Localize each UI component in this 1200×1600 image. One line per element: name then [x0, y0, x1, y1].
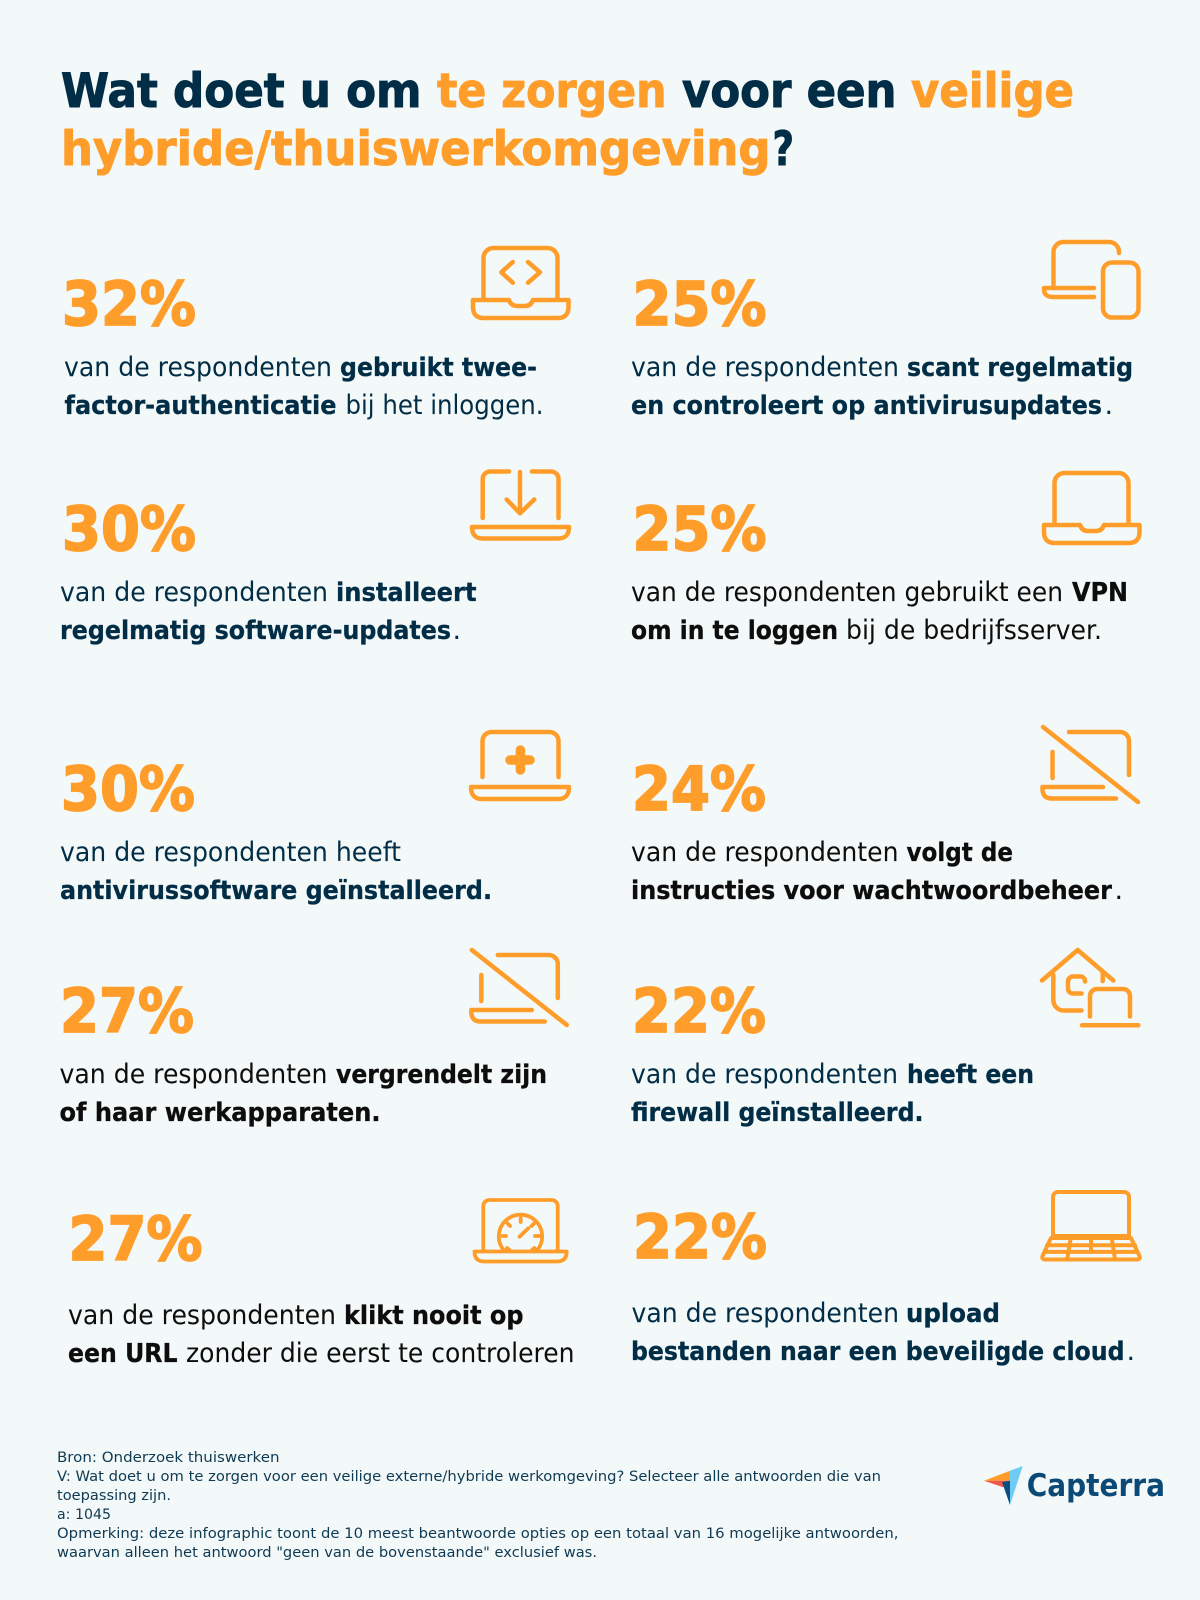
percentage 32%: 32%: [62, 269, 196, 340]
panel: 22% firewall: [631, 950, 1138, 1128]
percentage 27% URL: 27%: [68, 1204, 202, 1275]
Capterra logo: [984, 1466, 1165, 1505]
description 24%: van de respondenten: [631, 837, 898, 868]
description 27% URL: zonder die eerst te controleren: [186, 1338, 574, 1369]
description 27% lock: vergrendelt zijn: [336, 1060, 547, 1090]
description 22% cloud: upload: [906, 1299, 1000, 1329]
description 22% cloud: van de respondenten: [632, 1298, 899, 1329]
description 22% firewall: firewall geïnstalleerd.: [631, 1098, 924, 1128]
percentage 27% lock: 27%: [60, 976, 194, 1047]
description 24%: instructies voor wachtwoordbeheer: [631, 876, 1112, 906]
description 27% URL: [68, 1300, 574, 1369]
description 32%: [64, 352, 544, 421]
description 22% cloud: [631, 1298, 1135, 1367]
icon: laptop with code brackets: [473, 248, 568, 318]
description 22% cloud: bestanden naar een beveiligde cloud: [631, 1337, 1124, 1367]
description 27% URL: van de respondenten: [68, 1300, 336, 1331]
title: te zorgen: [437, 64, 666, 119]
panel: 22% secure cloud upload: [631, 1192, 1140, 1367]
percentage 30% antivirus: 30%: [61, 754, 195, 825]
panel: 32% two-factor authentication: [62, 248, 568, 421]
icon: laptop with gauge: [474, 1200, 567, 1262]
description 30% updates: regelmatig software-updates: [60, 616, 451, 646]
description 22% firewall: [631, 1059, 1034, 1128]
panel: 27% never click URL: [68, 1200, 574, 1369]
footer source notes: toepassing zijn.: [57, 1488, 171, 1504]
icon: laptop and phone: [1044, 242, 1138, 318]
icon: laptop with keyboard: [1042, 1192, 1140, 1260]
description 24%: volgt de: [906, 838, 1013, 868]
description 25% scan: van de respondenten: [631, 352, 899, 383]
description 24%: .: [1114, 875, 1123, 906]
description 25% VPN: van de respondenten gebruikt een: [631, 577, 1063, 608]
description 32%: gebruikt twee-: [340, 353, 537, 383]
description 25% VPN: bij de bedrijfsserver.: [846, 615, 1102, 646]
description 30% antivirus: antivirussoftware geïnstalleerd.: [60, 876, 492, 906]
title: ?: [772, 122, 794, 177]
description 30% antivirus: van de respondenten heeft: [60, 837, 401, 868]
icon: crossed-out laptop: [471, 950, 567, 1025]
description 25% scan: [631, 352, 1133, 421]
logo mark: [984, 1466, 1023, 1505]
panel: 30% software updates: [60, 472, 569, 646]
description 25% scan: scant regelmatig: [907, 353, 1133, 383]
percentage 22% firewall: 22%: [632, 976, 766, 1047]
description 27% lock: of haar werkapparaten.: [60, 1098, 380, 1128]
icon: house with laptop: [1042, 950, 1138, 1025]
description 30% updates: installeert: [336, 578, 476, 608]
footer source notes: a: 1045: [57, 1507, 111, 1523]
title: veilige: [911, 64, 1074, 119]
description 30% antivirus: [60, 837, 492, 906]
description 27% lock: van de respondenten: [60, 1059, 328, 1090]
panel: 24% password instructions: [631, 727, 1138, 906]
description 25% VPN: om in te loggen: [631, 616, 838, 646]
description 27% URL: een URL: [68, 1339, 178, 1369]
title: [61, 64, 1074, 177]
description 32%: factor-authenticatie: [64, 391, 336, 421]
description 30% updates: van de respondenten: [60, 577, 328, 608]
footer source notes: Bron: Onderzoek thuiswerken: [57, 1450, 280, 1466]
panel: 25% VPN: [631, 473, 1140, 646]
panel: 25% virus scan: [631, 242, 1138, 421]
description 27% URL: klikt nooit op: [344, 1301, 524, 1331]
logo wordmark: Capterra: [1027, 1468, 1165, 1504]
title: voor een: [682, 64, 896, 119]
description 22% firewall: heeft een: [907, 1060, 1034, 1090]
description 24%: [631, 837, 1123, 906]
description 22% cloud: .: [1126, 1336, 1135, 1367]
description 32%: bij het inloggen.: [346, 390, 544, 421]
description 25% VPN: VPN: [1072, 578, 1128, 608]
icon: laptop with plus: [471, 732, 569, 799]
description 30% updates: .: [452, 615, 461, 646]
description 22% firewall: van de respondenten: [631, 1059, 898, 1090]
description 30% updates: [60, 577, 476, 646]
panel: 27% lock devices: [60, 950, 567, 1128]
icon: crossed-out laptop: [1042, 727, 1138, 802]
description 25% scan: .: [1104, 390, 1113, 421]
percentage 30% updates: 30%: [62, 494, 196, 565]
icon: laptop: [1044, 473, 1140, 543]
panel: 30% antivirus software: [60, 732, 569, 906]
footer source notes: V: Wat doet u om te zorgen voor een veilige externe/hybride werkomgeving? Selecteer alle antwoorden die van: [57, 1469, 881, 1485]
title: hybride/thuiswerkomgeving: [61, 122, 770, 177]
icon: laptop with download arrow: [472, 472, 569, 538]
description 25% scan: en controleert op antivirusupdates: [631, 391, 1102, 421]
percentage 22% cloud: 22%: [633, 1202, 767, 1273]
description 27% lock: [60, 1059, 547, 1128]
footer source notes: waarvan alleen het antwoord "geen van de bovenstaande" exclusief was.: [57, 1545, 597, 1561]
description 32%: van de respondenten: [64, 352, 332, 383]
percentage 25% VPN: 25%: [632, 494, 766, 565]
percentage 25%: 25%: [632, 269, 766, 340]
footer source notes: [57, 1450, 898, 1561]
footer source notes: Opmerking: deze infographic toont de 10 meest beantwoorde opties op een totaal van 16 mogelijke antwoorden,: [57, 1526, 898, 1542]
description 25% VPN: [631, 577, 1128, 646]
percentage 24%: 24%: [632, 754, 766, 825]
title: Wat doet u om: [61, 64, 422, 119]
